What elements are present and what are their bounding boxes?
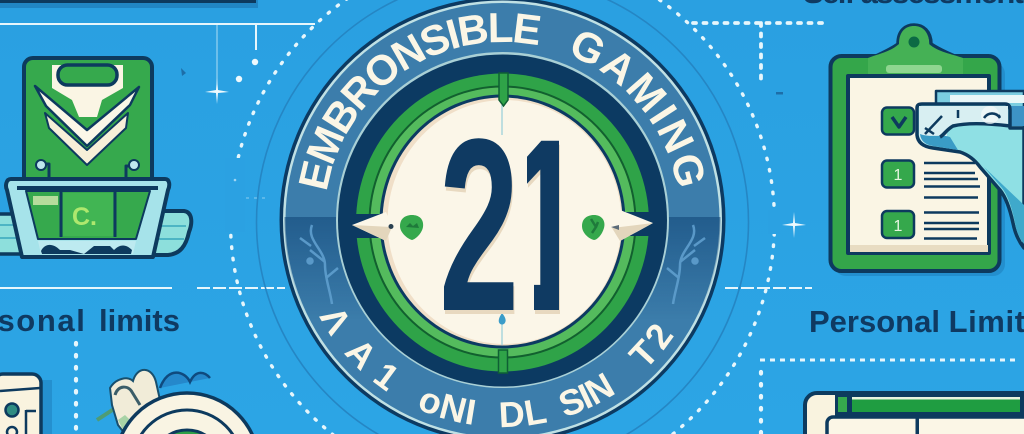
curved title text: EMBRONSIBLE <box>298 13 540 190</box>
sky patch covering dotted gaps <box>225 158 780 234</box>
curved bottom text <box>319 312 674 428</box>
curved bottom text: A <box>344 343 372 372</box>
icon: right branch ornament <box>667 225 705 304</box>
hand <box>917 104 1024 248</box>
icon: bottom right table card <box>805 393 1024 434</box>
big number 21: 2 <box>439 87 519 362</box>
badge outer rings <box>280 0 726 434</box>
clipboard clip <box>867 25 964 76</box>
checkbox rows: 1 <box>894 167 903 184</box>
checkbox rows: 1 <box>894 218 903 235</box>
tray label glyph: C. <box>72 203 97 231</box>
curved bottom text: T2 <box>628 324 674 364</box>
curved title text second word: GAMING <box>572 32 704 186</box>
curved bottom text: SIN <box>560 372 615 416</box>
small dots and sparkles <box>181 59 806 238</box>
icon: left branch ornament <box>300 225 338 304</box>
checkbox rows <box>882 108 914 238</box>
big number 21 <box>444 138 560 314</box>
curved bottom text: Λ <box>319 312 348 337</box>
curved bottom text: 1 <box>373 365 397 392</box>
top left card edge <box>0 0 258 8</box>
icon: right cuff of hand <box>150 211 191 255</box>
hand card <box>936 91 1024 128</box>
icon: green gift card with tray <box>0 58 191 257</box>
badge navy and green rings <box>336 52 669 388</box>
big number 21: 1 <box>507 87 586 363</box>
tray body <box>6 179 169 257</box>
pointer: right <box>611 210 653 241</box>
icon: bottom left document <box>0 374 52 434</box>
central badge <box>280 0 726 434</box>
ring notches <box>498 73 508 373</box>
curved bottom text: oNI <box>420 394 476 425</box>
pointer: left <box>352 212 394 241</box>
icon: left cuff of hand <box>0 214 28 254</box>
icon: right green drop <box>582 215 604 240</box>
icon: left green drop <box>400 215 423 240</box>
icon: target with leaves <box>97 370 259 434</box>
icon: clipboard checklist with hand <box>830 25 1024 276</box>
